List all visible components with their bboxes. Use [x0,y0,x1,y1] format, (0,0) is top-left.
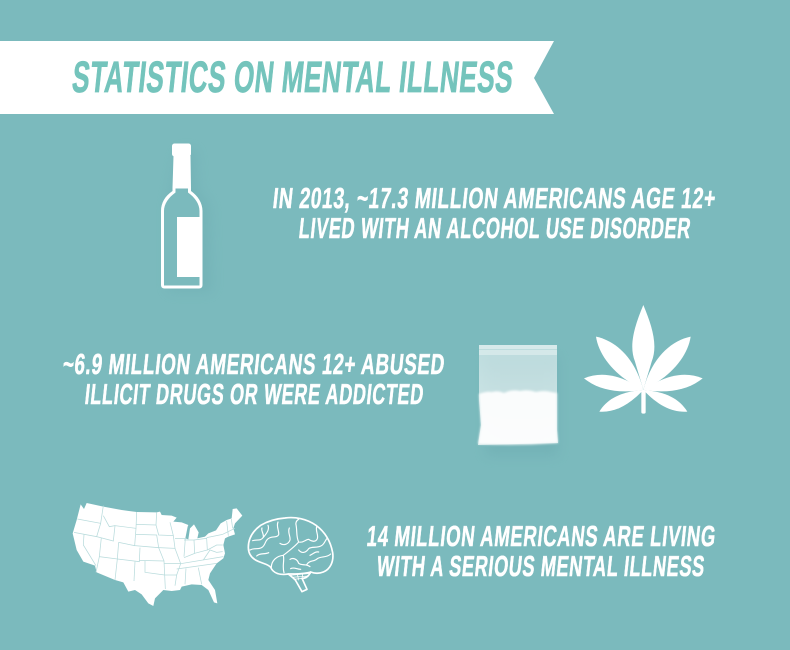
icon: cannabis leaf [584,305,703,414]
text: illicit drugs statistic: ILLICIT DRUGS OR WERE ADDICTED [83,379,426,411]
text: illicit drugs statistic: ~6.9 MILLION AMERICANS 12+ ABUSED [61,349,447,381]
icon: plastic bag [478,345,558,456]
icon: brain [248,518,333,592]
text: mental illness statistic [365,521,718,583]
text: alcohol statistic [271,183,718,245]
text: illicit drugs statistic [61,349,447,411]
title banner [0,41,554,114]
icon: bottle [161,144,212,292]
icon: map of the United States [73,503,242,606]
